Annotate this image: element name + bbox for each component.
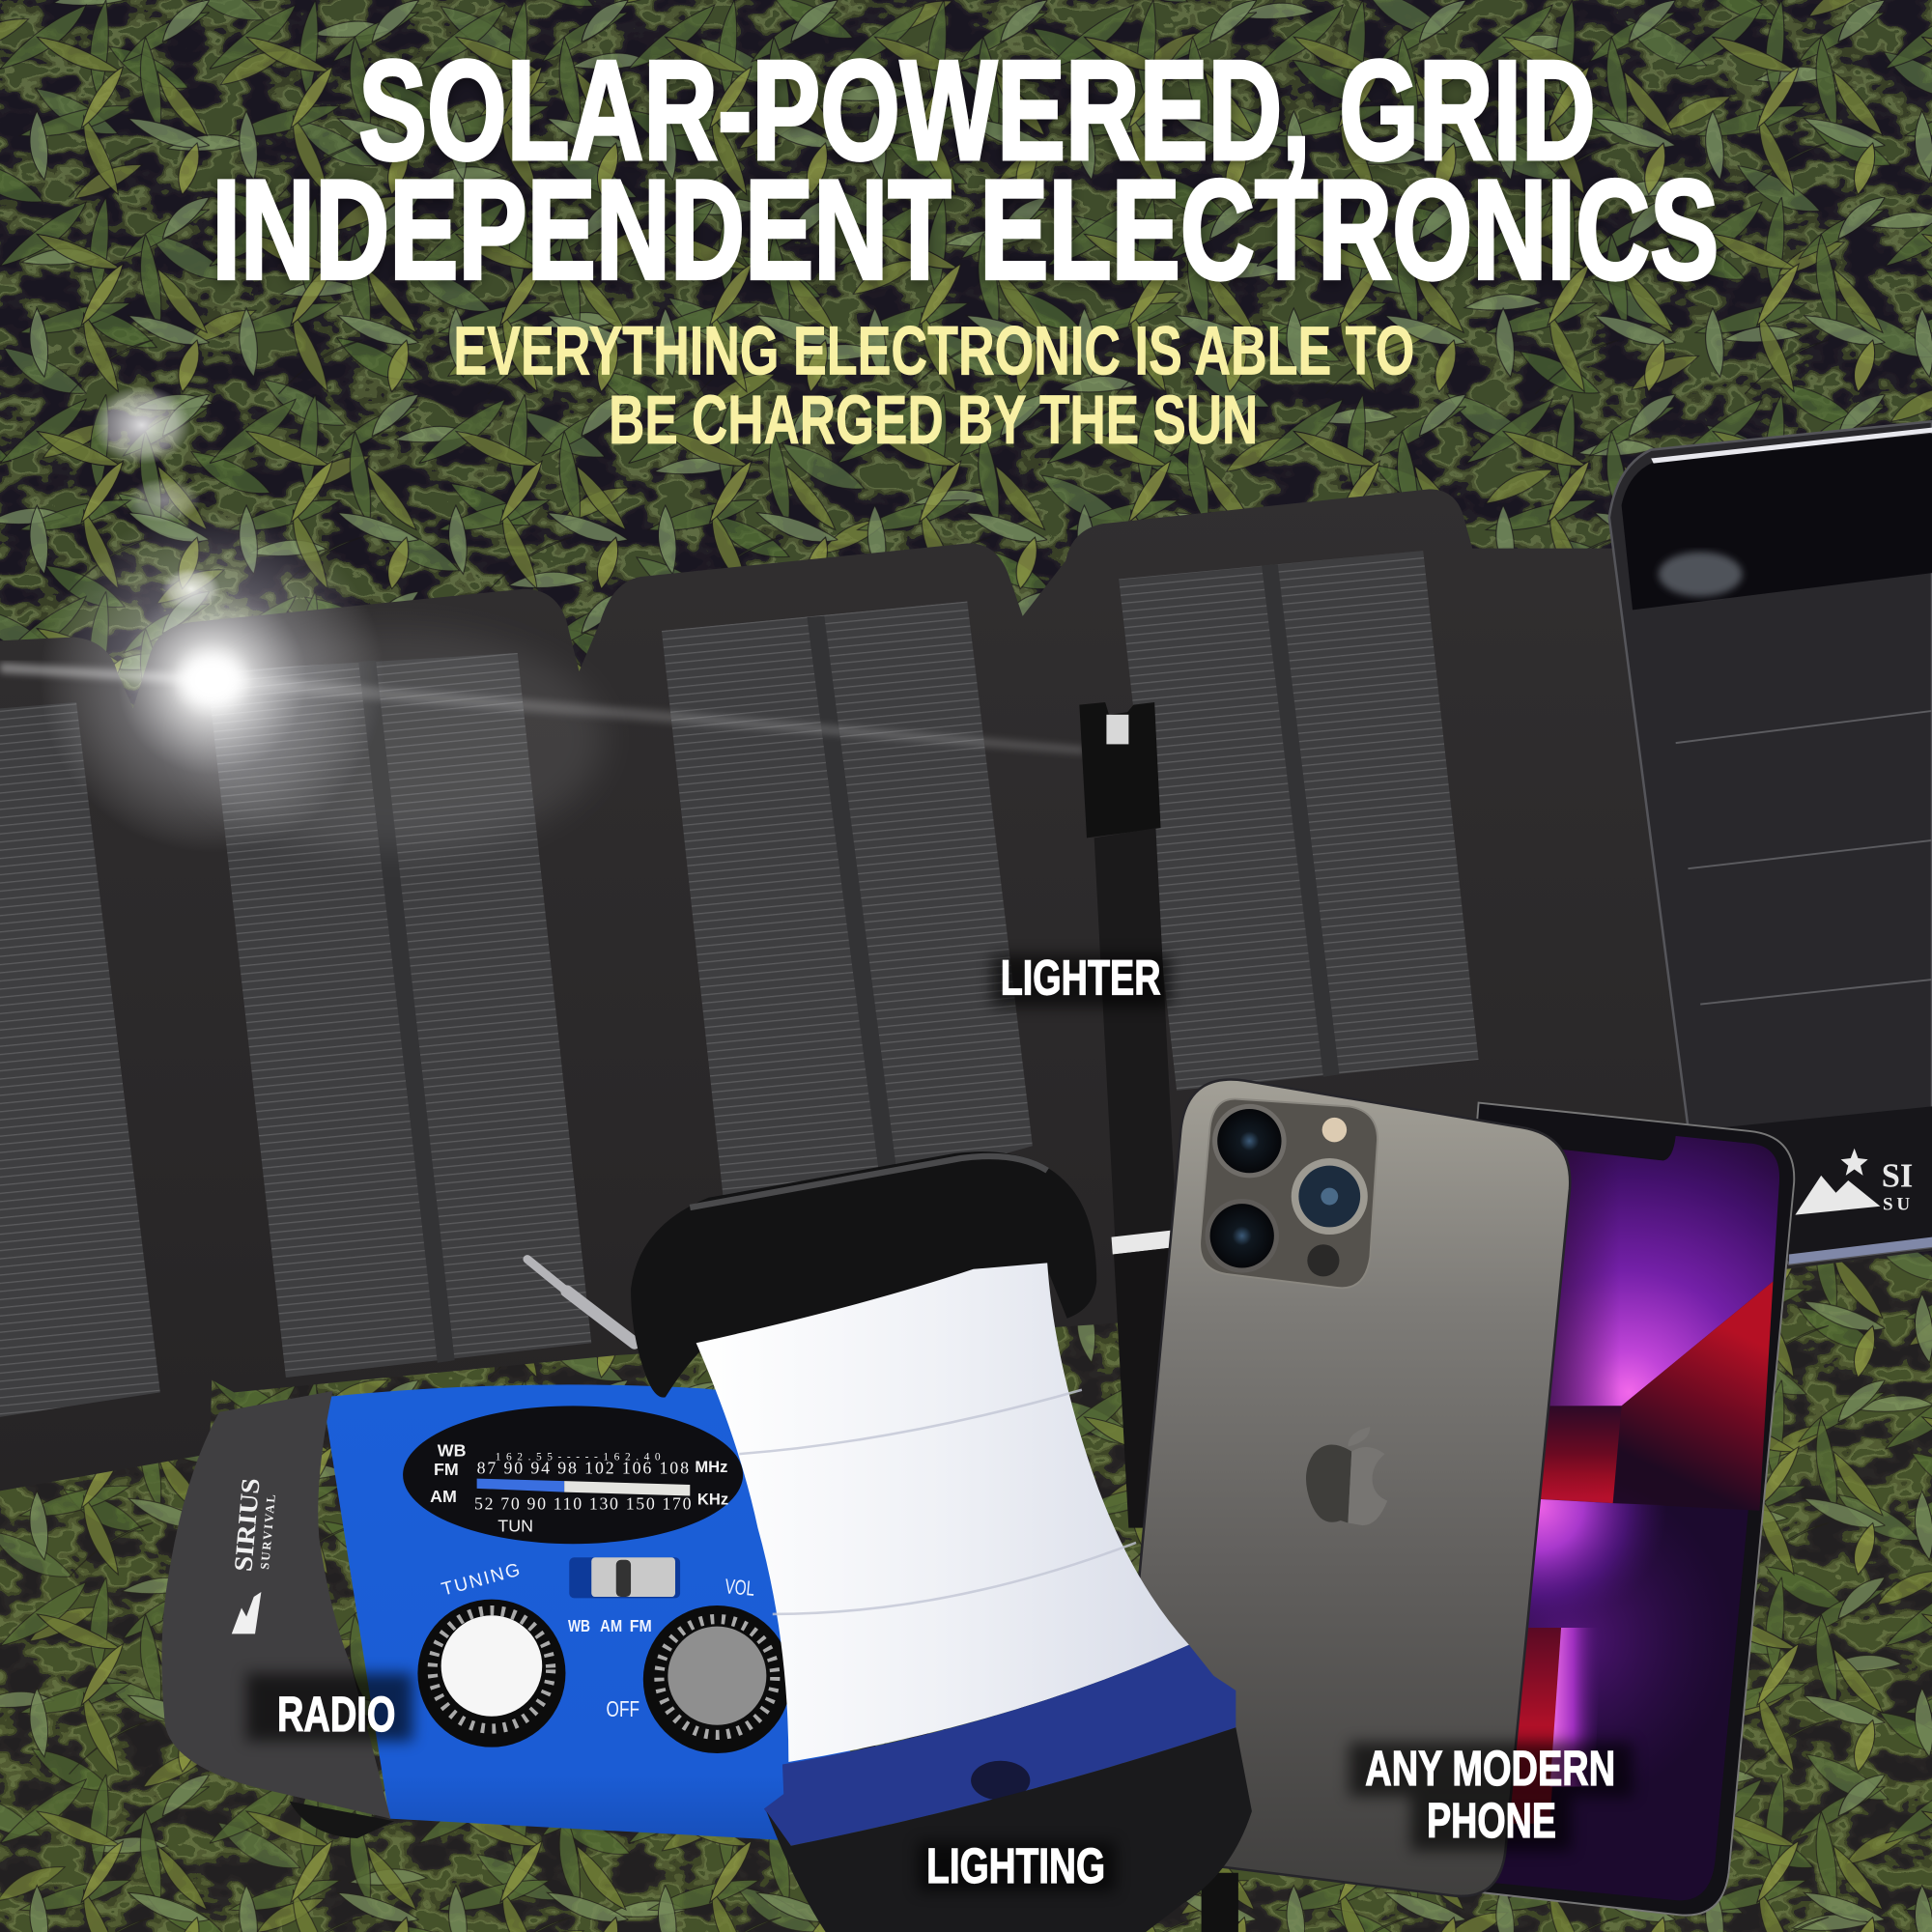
lidar: [1307, 1244, 1339, 1276]
tuner text: AM: [430, 1487, 457, 1506]
camera bump: [1200, 1099, 1378, 1288]
blue housing: [323, 1384, 850, 1844]
lantern blue ring: [764, 1645, 1236, 1846]
subtitle: [453, 313, 1414, 459]
solar cell B: [207, 653, 591, 1378]
radio control labels: [440, 1559, 755, 1721]
label: lighter: LIGHTER: [1001, 950, 1161, 1005]
antenna: [527, 1260, 635, 1343]
lantern diffuser: [696, 1263, 1189, 1762]
tuning bar: [477, 1479, 690, 1495]
logo strip: [1686, 1106, 1932, 1254]
label backings: [246, 955, 1633, 1891]
radio control labels: TUNING: [440, 1559, 524, 1601]
solar cell A: [0, 702, 160, 1417]
grey grip: [161, 1391, 390, 1819]
red bar: [1506, 1628, 1561, 1824]
lens 1: [1212, 1104, 1287, 1178]
product: lantern: [631, 1151, 1252, 1932]
power bank body: [1609, 421, 1932, 1264]
lantern button: [971, 1761, 1030, 1801]
radio control labels: FM: [630, 1616, 652, 1635]
lantern base: [766, 1727, 1252, 1932]
glossy top: [1622, 434, 1932, 610]
solar cell D: [1119, 551, 1479, 1091]
tuner text: 87 90 94 98 102 106 108: [477, 1459, 689, 1478]
pink strip: [1550, 1628, 1602, 1786]
tuner text: TUN: [497, 1516, 533, 1535]
tuner text: WB: [438, 1441, 467, 1461]
label: any modern phone: [1365, 1741, 1615, 1848]
logo mark: SU: [1883, 1195, 1914, 1215]
screen base: [1466, 1136, 1779, 1900]
logo mark: SI: [1882, 1157, 1913, 1194]
tuner text: KHz: [697, 1490, 728, 1508]
lens 2: [1292, 1158, 1368, 1235]
band slider: [569, 1557, 680, 1598]
tuner text: FM: [434, 1460, 459, 1479]
radio control labels: AM: [600, 1616, 622, 1635]
subtitle: BE CHARGED BY THE SUN: [609, 382, 1258, 459]
screen upper glow: [1528, 1136, 1779, 1406]
purple wash: [1528, 1490, 1703, 1752]
brand text: [228, 1477, 278, 1634]
logo mark: [1795, 1149, 1914, 1215]
folding solar panel: [0, 489, 1932, 1491]
tuner text: 52 70 90 110 130 150 170: [474, 1493, 692, 1513]
power bank: [1609, 421, 1932, 1264]
phone front: [1476, 1101, 1795, 1917]
tuner display: [403, 1406, 743, 1544]
tuner text: MHz: [695, 1458, 727, 1476]
solar cell C: [662, 601, 1033, 1233]
brand text: SURVIVAL: [258, 1492, 278, 1570]
panel fabric: [0, 489, 1932, 1491]
label: radio: RADIO: [277, 1687, 395, 1742]
screen left dim: [1528, 1146, 1622, 1406]
tuning knob: [417, 1600, 565, 1747]
red left shade: [1528, 1406, 1622, 1503]
radio control labels: WB: [568, 1616, 590, 1635]
flash: [1322, 1118, 1347, 1142]
brand text: SIRIUS: [228, 1477, 266, 1573]
tuner text: 162.55-----162.40: [496, 1451, 661, 1463]
radio control labels: OFF: [607, 1696, 639, 1721]
product: radio: [161, 1260, 850, 1844]
sun flare: [0, 385, 1084, 853]
product: lighter: [1079, 702, 1238, 1932]
product: phone: [1118, 1080, 1794, 1916]
label: lighting: LIGHTING: [926, 1838, 1105, 1893]
tuner text: [430, 1441, 728, 1535]
pink band: [1523, 1498, 1676, 1638]
apple logo: [1306, 1427, 1387, 1525]
handle base: [290, 1802, 394, 1838]
radio control labels: VOL: [724, 1574, 755, 1601]
volume knob: [643, 1605, 791, 1753]
label: any modern phone: ANY MODERN: [1365, 1741, 1615, 1796]
subtitle: EVERYTHING ELECTRONIC IS ABLE TO: [453, 313, 1414, 390]
label: any modern phone: PHONE: [1427, 1793, 1556, 1848]
lantern top cap: [631, 1151, 1096, 1398]
title: [212, 32, 1719, 309]
lens 3: [1205, 1199, 1279, 1273]
red wedge: [1613, 1282, 1773, 1511]
phone back: [1118, 1080, 1570, 1896]
